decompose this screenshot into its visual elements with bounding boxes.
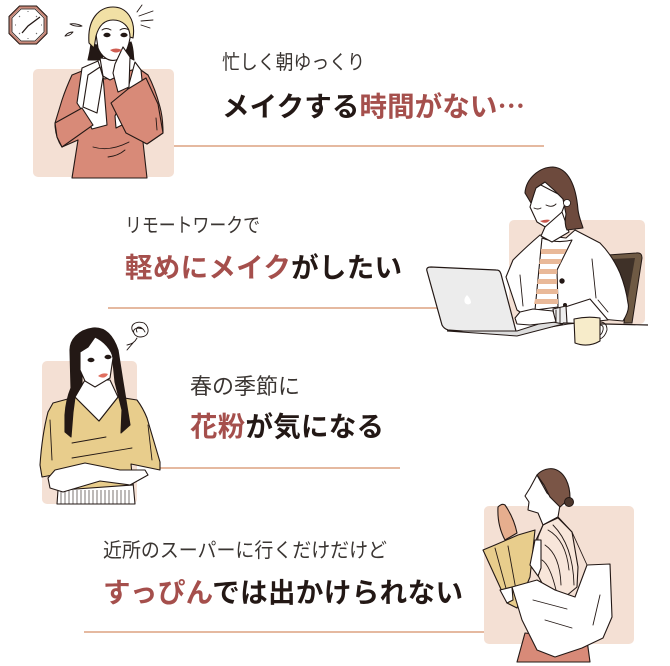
text: small heading 3: 春の季節に bbox=[190, 374, 300, 399]
illustration: woman with crossed arms bbox=[40, 322, 160, 504]
illustration: woman with towel bbox=[55, 5, 163, 178]
illustration: woman with laptop bbox=[427, 167, 648, 345]
icon: mug bbox=[574, 317, 607, 345]
chair bbox=[608, 253, 642, 323]
text: main heading 3: 花粉が気になる bbox=[190, 411, 384, 442]
panel: peach backdrop 4 bbox=[484, 506, 634, 644]
panel: peach backdrop 1 bbox=[33, 69, 174, 177]
icon: wall clock bbox=[9, 6, 47, 44]
section 3: hay fever bbox=[40, 322, 400, 504]
text: main heading 1: メイクする時間がない… bbox=[222, 84, 525, 124]
divider line 1 bbox=[174, 145, 544, 147]
section 4: going out bare-faced bbox=[84, 469, 634, 662]
text: small heading 1: 忙しく朝ゆっくり bbox=[222, 51, 365, 74]
panel: peach backdrop 3 bbox=[42, 361, 137, 504]
panel: peach backdrop 2 bbox=[509, 220, 645, 324]
illustration: woman with shopping bags bbox=[483, 469, 612, 662]
text: small heading 4: 近所のスーパーに行くだけだけど bbox=[103, 539, 387, 562]
divider line 3 bbox=[158, 467, 400, 469]
divider line 2 bbox=[108, 307, 438, 309]
section 2: light remote-work makeup bbox=[108, 167, 648, 345]
section 1: no time for makeup bbox=[9, 5, 544, 178]
text: main heading 2: 軽めにメイクがしたい bbox=[125, 252, 402, 283]
divider line 4 bbox=[84, 631, 484, 633]
text: main heading 4: すっぴんでは出かけられない bbox=[103, 577, 463, 608]
text: small heading 2: リモートワークで bbox=[125, 214, 260, 237]
